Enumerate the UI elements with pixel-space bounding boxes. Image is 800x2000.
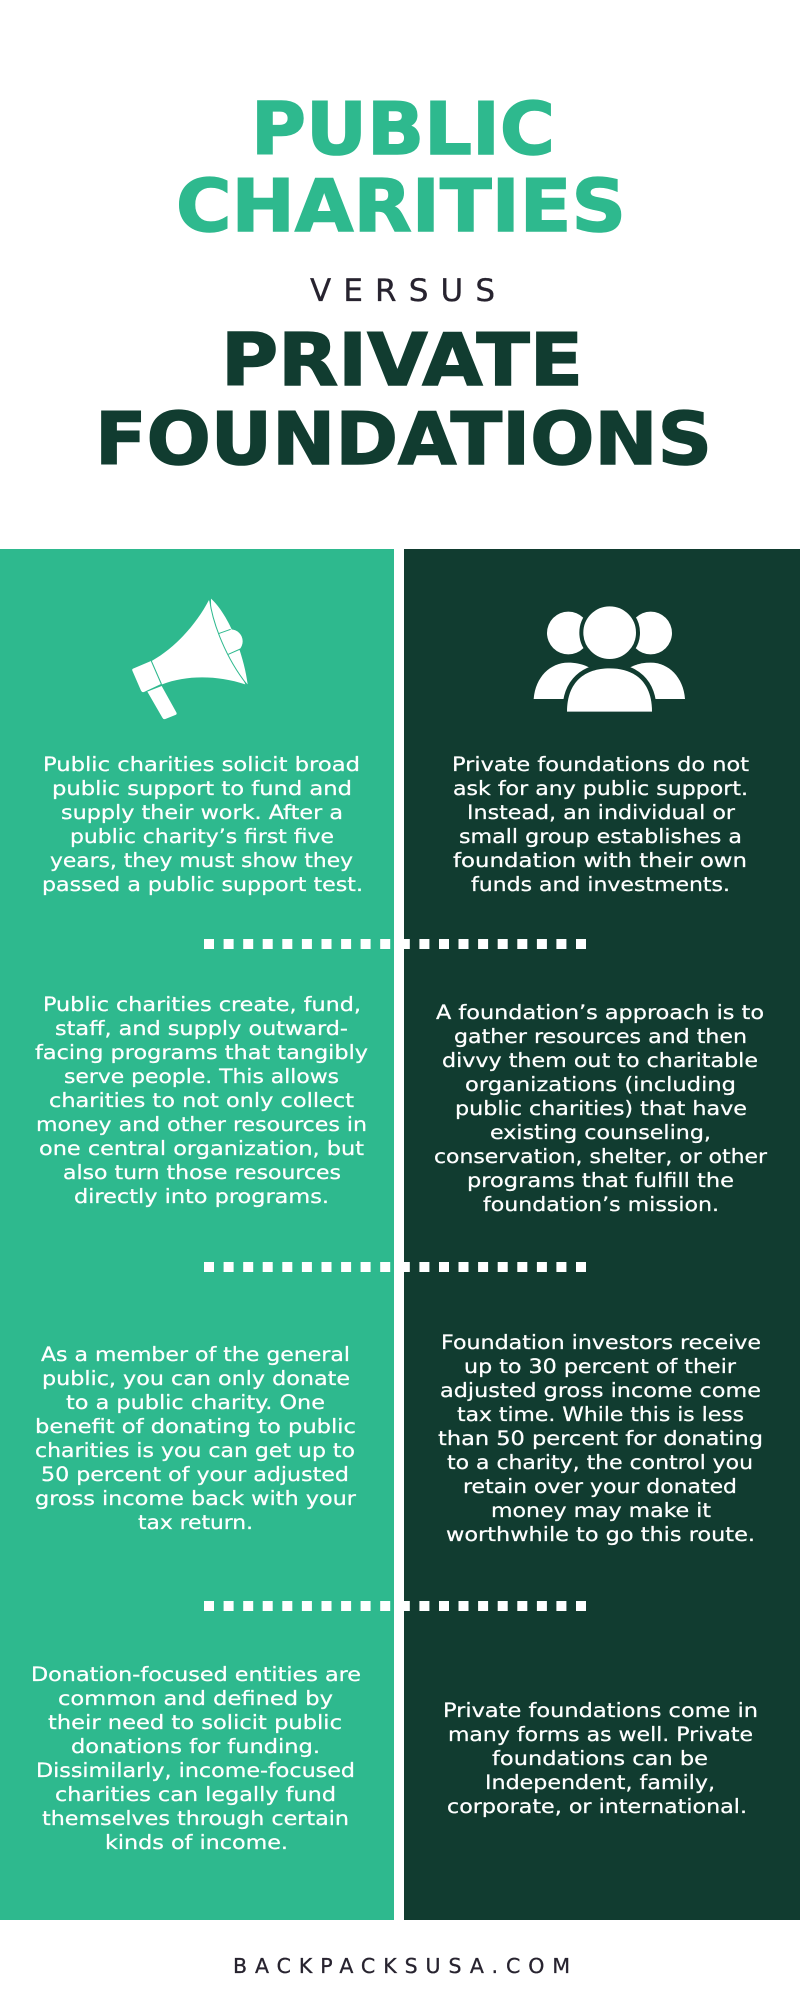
text: programs: Public charities create, fund, <box>43 993 361 1016</box>
text: entity types: their need to solicit public <box>48 1711 342 1734</box>
text: foundation forms: many forms as well. Private <box>448 1723 753 1746</box>
text: entity types: Dissimilarly, income-focused <box>36 1759 355 1782</box>
text: programs: staff, and supply outward- <box>55 1017 348 1040</box>
text: foundation investors: than 50 percent for donating <box>438 1427 763 1450</box>
text: foundation approach: gather resources and then <box>454 1025 747 1048</box>
text: entity types: donations for funding. <box>71 1735 320 1758</box>
text: programs: one central organization, but <box>39 1137 364 1160</box>
text: public support: Public charities solicit broad <box>43 753 360 776</box>
text: foundation approach: existing counseling, <box>490 1121 711 1144</box>
text: entity types: charities can legally fund <box>55 1783 336 1806</box>
text: foundation investors: adjusted gross income come <box>440 1379 761 1402</box>
text: donating: to a public charity. One <box>66 1391 325 1414</box>
text: programs <box>35 993 368 1208</box>
text: donating: tax return. <box>138 1511 253 1534</box>
title: CHARITIES <box>176 165 626 249</box>
text: programs: serve people. This allows <box>64 1065 339 1088</box>
text: public support <box>42 753 363 896</box>
text: public support: public support to fund and <box>52 777 352 800</box>
text: public support: public charity’s first five <box>70 825 334 848</box>
title: PUBLIC <box>251 88 555 172</box>
text: foundation investors: tax time. While this is less <box>457 1403 744 1426</box>
title: PRIVATE <box>221 319 583 403</box>
text: no public support: small group establishes a <box>459 825 742 848</box>
text: no public support <box>452 753 749 896</box>
text: entity types: common and defined by <box>58 1687 333 1710</box>
icon: megaphone <box>132 599 248 719</box>
text: entity types: themselves through certain <box>42 1807 349 1830</box>
text: public support: supply their work. After a <box>61 801 343 824</box>
text: foundation approach: organizations (including <box>465 1073 736 1096</box>
text: foundation approach <box>434 1001 768 1216</box>
text: foundation investors: worthwhile to go this route. <box>446 1523 755 1546</box>
title: VERSUS <box>310 273 495 309</box>
title <box>95 88 712 482</box>
text: foundation approach: public charities) that have <box>455 1097 747 1120</box>
text: foundation approach: conservation, shelter, or other <box>434 1145 768 1168</box>
text: foundation investors <box>438 1331 763 1546</box>
text: foundation approach: programs that fulfill the <box>467 1169 734 1192</box>
text: donating: gross income back with your <box>35 1487 357 1510</box>
text: donating <box>35 1343 357 1534</box>
text: programs: directly into programs. <box>74 1185 329 1208</box>
text: foundation investors: retain over your donated <box>463 1475 737 1498</box>
text: foundation approach: A foundation’s approach is to <box>436 1001 764 1024</box>
text: donating: As a member of the general <box>41 1343 350 1366</box>
text: foundation investors: money may make it <box>491 1499 711 1522</box>
text: donating: public, you can only donate <box>42 1367 350 1390</box>
panel: public charities <box>0 549 394 1920</box>
panel: private foundations <box>404 549 800 1920</box>
text: no public support: funds and investments. <box>471 873 730 896</box>
text: entity types: kinds of income. <box>105 1831 288 1854</box>
title: FOUNDATIONS <box>95 398 712 482</box>
text: public support: passed a public support test. <box>42 873 363 896</box>
text: donating: 50 percent of your adjusted <box>41 1463 349 1486</box>
text: foundation forms: corporate, or international. <box>447 1795 747 1818</box>
text: foundation forms: Private foundations come in <box>443 1699 758 1722</box>
footer: website: BACKPACKSUSA.COM <box>233 1954 570 1978</box>
text: no public support: foundation with their own <box>453 849 747 872</box>
text: no public support: ask for any public support. <box>453 777 748 800</box>
text: programs: also turn those resources <box>63 1161 341 1184</box>
text: foundation approach: foundation’s mission. <box>483 1193 719 1216</box>
text: public support: years, they must show they <box>50 849 353 872</box>
text: donating: charities is you can get up to <box>35 1439 355 1462</box>
text: entity types <box>31 1663 361 1854</box>
text: entity types: Donation-focused entities are <box>31 1663 361 1686</box>
text: programs: money and other resources in <box>36 1113 367 1136</box>
icon: people group <box>534 604 685 712</box>
text: programs: charities to not only collect <box>49 1089 354 1112</box>
text: foundation investors: to a charity, the control you <box>447 1451 753 1474</box>
text: donating: benefit of donating to public <box>35 1415 356 1438</box>
text: no public support: Instead, an individual or <box>467 801 736 824</box>
text: foundation forms: foundations can be <box>492 1747 708 1770</box>
text: programs: facing programs that tangibly <box>35 1041 368 1064</box>
text: foundation forms: Independent, family, <box>485 1771 715 1794</box>
text: foundation investors: Foundation investors receive <box>441 1331 761 1354</box>
text: foundation approach: divvy them out to charitable <box>442 1049 758 1072</box>
text: no public support: Private foundations do not <box>452 753 749 776</box>
text: foundation forms <box>443 1699 758 1818</box>
text: foundation investors: up to 30 percent of their <box>464 1355 737 1378</box>
